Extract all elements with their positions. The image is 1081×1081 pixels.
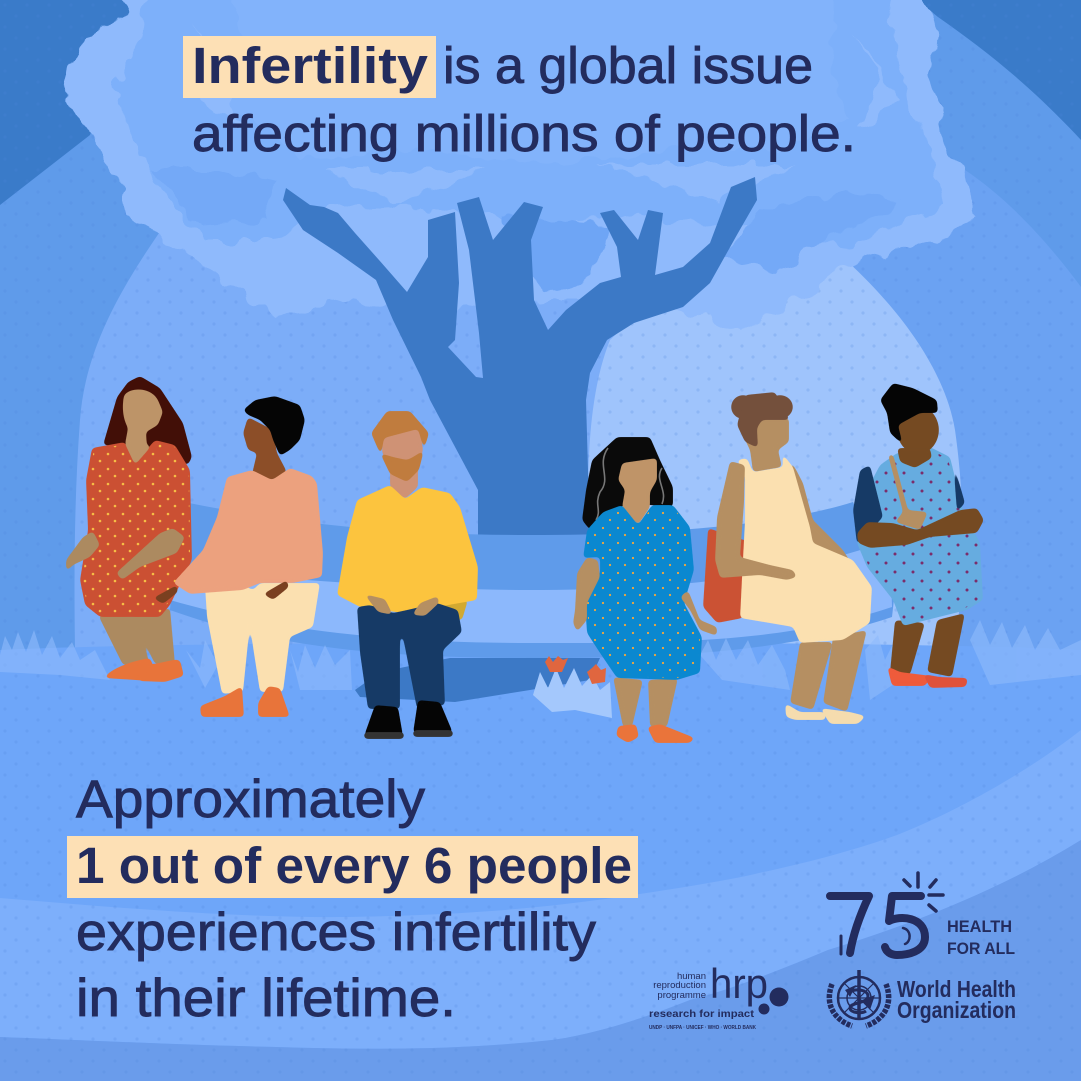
statistic line: 1 out of every 6 people (76, 837, 632, 894)
title (183, 36, 813, 98)
logo: WHO 75 health for all: FOR ALL (947, 939, 1015, 958)
person 4: woman in blue dress (573, 437, 717, 743)
person 6: woman in light blue dress (853, 383, 984, 688)
logo: WHO 75 health for all (830, 873, 1015, 958)
person 1: woman in red dress (66, 376, 192, 682)
lifetime line: in their lifetime. (76, 969, 456, 1028)
flowers (545, 656, 606, 684)
research for impact: research for impact (649, 1008, 755, 1020)
person 5: woman in cream dress (703, 392, 872, 724)
statistic highlight (67, 836, 638, 898)
grass tuft under flowers (533, 668, 612, 718)
logo: World Health Organization (829, 970, 1016, 1026)
hrp dots (758, 988, 788, 1014)
hrp small text: human (677, 971, 706, 982)
person 3: man in yellow sweater (337, 411, 478, 739)
WHO wordmark: World Health (897, 976, 1016, 1002)
person 2: woman in peach top (153, 396, 323, 717)
cosponsors: UNDP · UNFPA · UNICEF · WHO · WORLD BANK (649, 1025, 756, 1031)
title highlight (183, 36, 436, 98)
hrp wordmark: hrp (710, 960, 768, 1007)
logo: HRP: programme (657, 990, 706, 1001)
grass (0, 620, 1081, 700)
health for all: HEALTH (947, 917, 1012, 936)
75 mark (830, 896, 925, 955)
statistic statement (67, 770, 638, 1028)
experiences line: experiences infertility (76, 903, 597, 962)
sun rays (904, 873, 943, 911)
logo: World Health Organization: Organization (897, 997, 1016, 1023)
approximately: Approximately (76, 770, 426, 829)
title line 1: Infertility (192, 37, 429, 94)
logo: HRP: reproduction (653, 980, 706, 991)
logo: HRP (649, 960, 788, 1031)
bench (170, 502, 895, 702)
title line 2: affecting millions of people. (192, 105, 856, 162)
tree canopy (62, 0, 976, 333)
tree trunk and branches (283, 177, 757, 540)
WHO emblem (829, 970, 889, 1026)
title line 1: is a global issue (443, 37, 813, 94)
